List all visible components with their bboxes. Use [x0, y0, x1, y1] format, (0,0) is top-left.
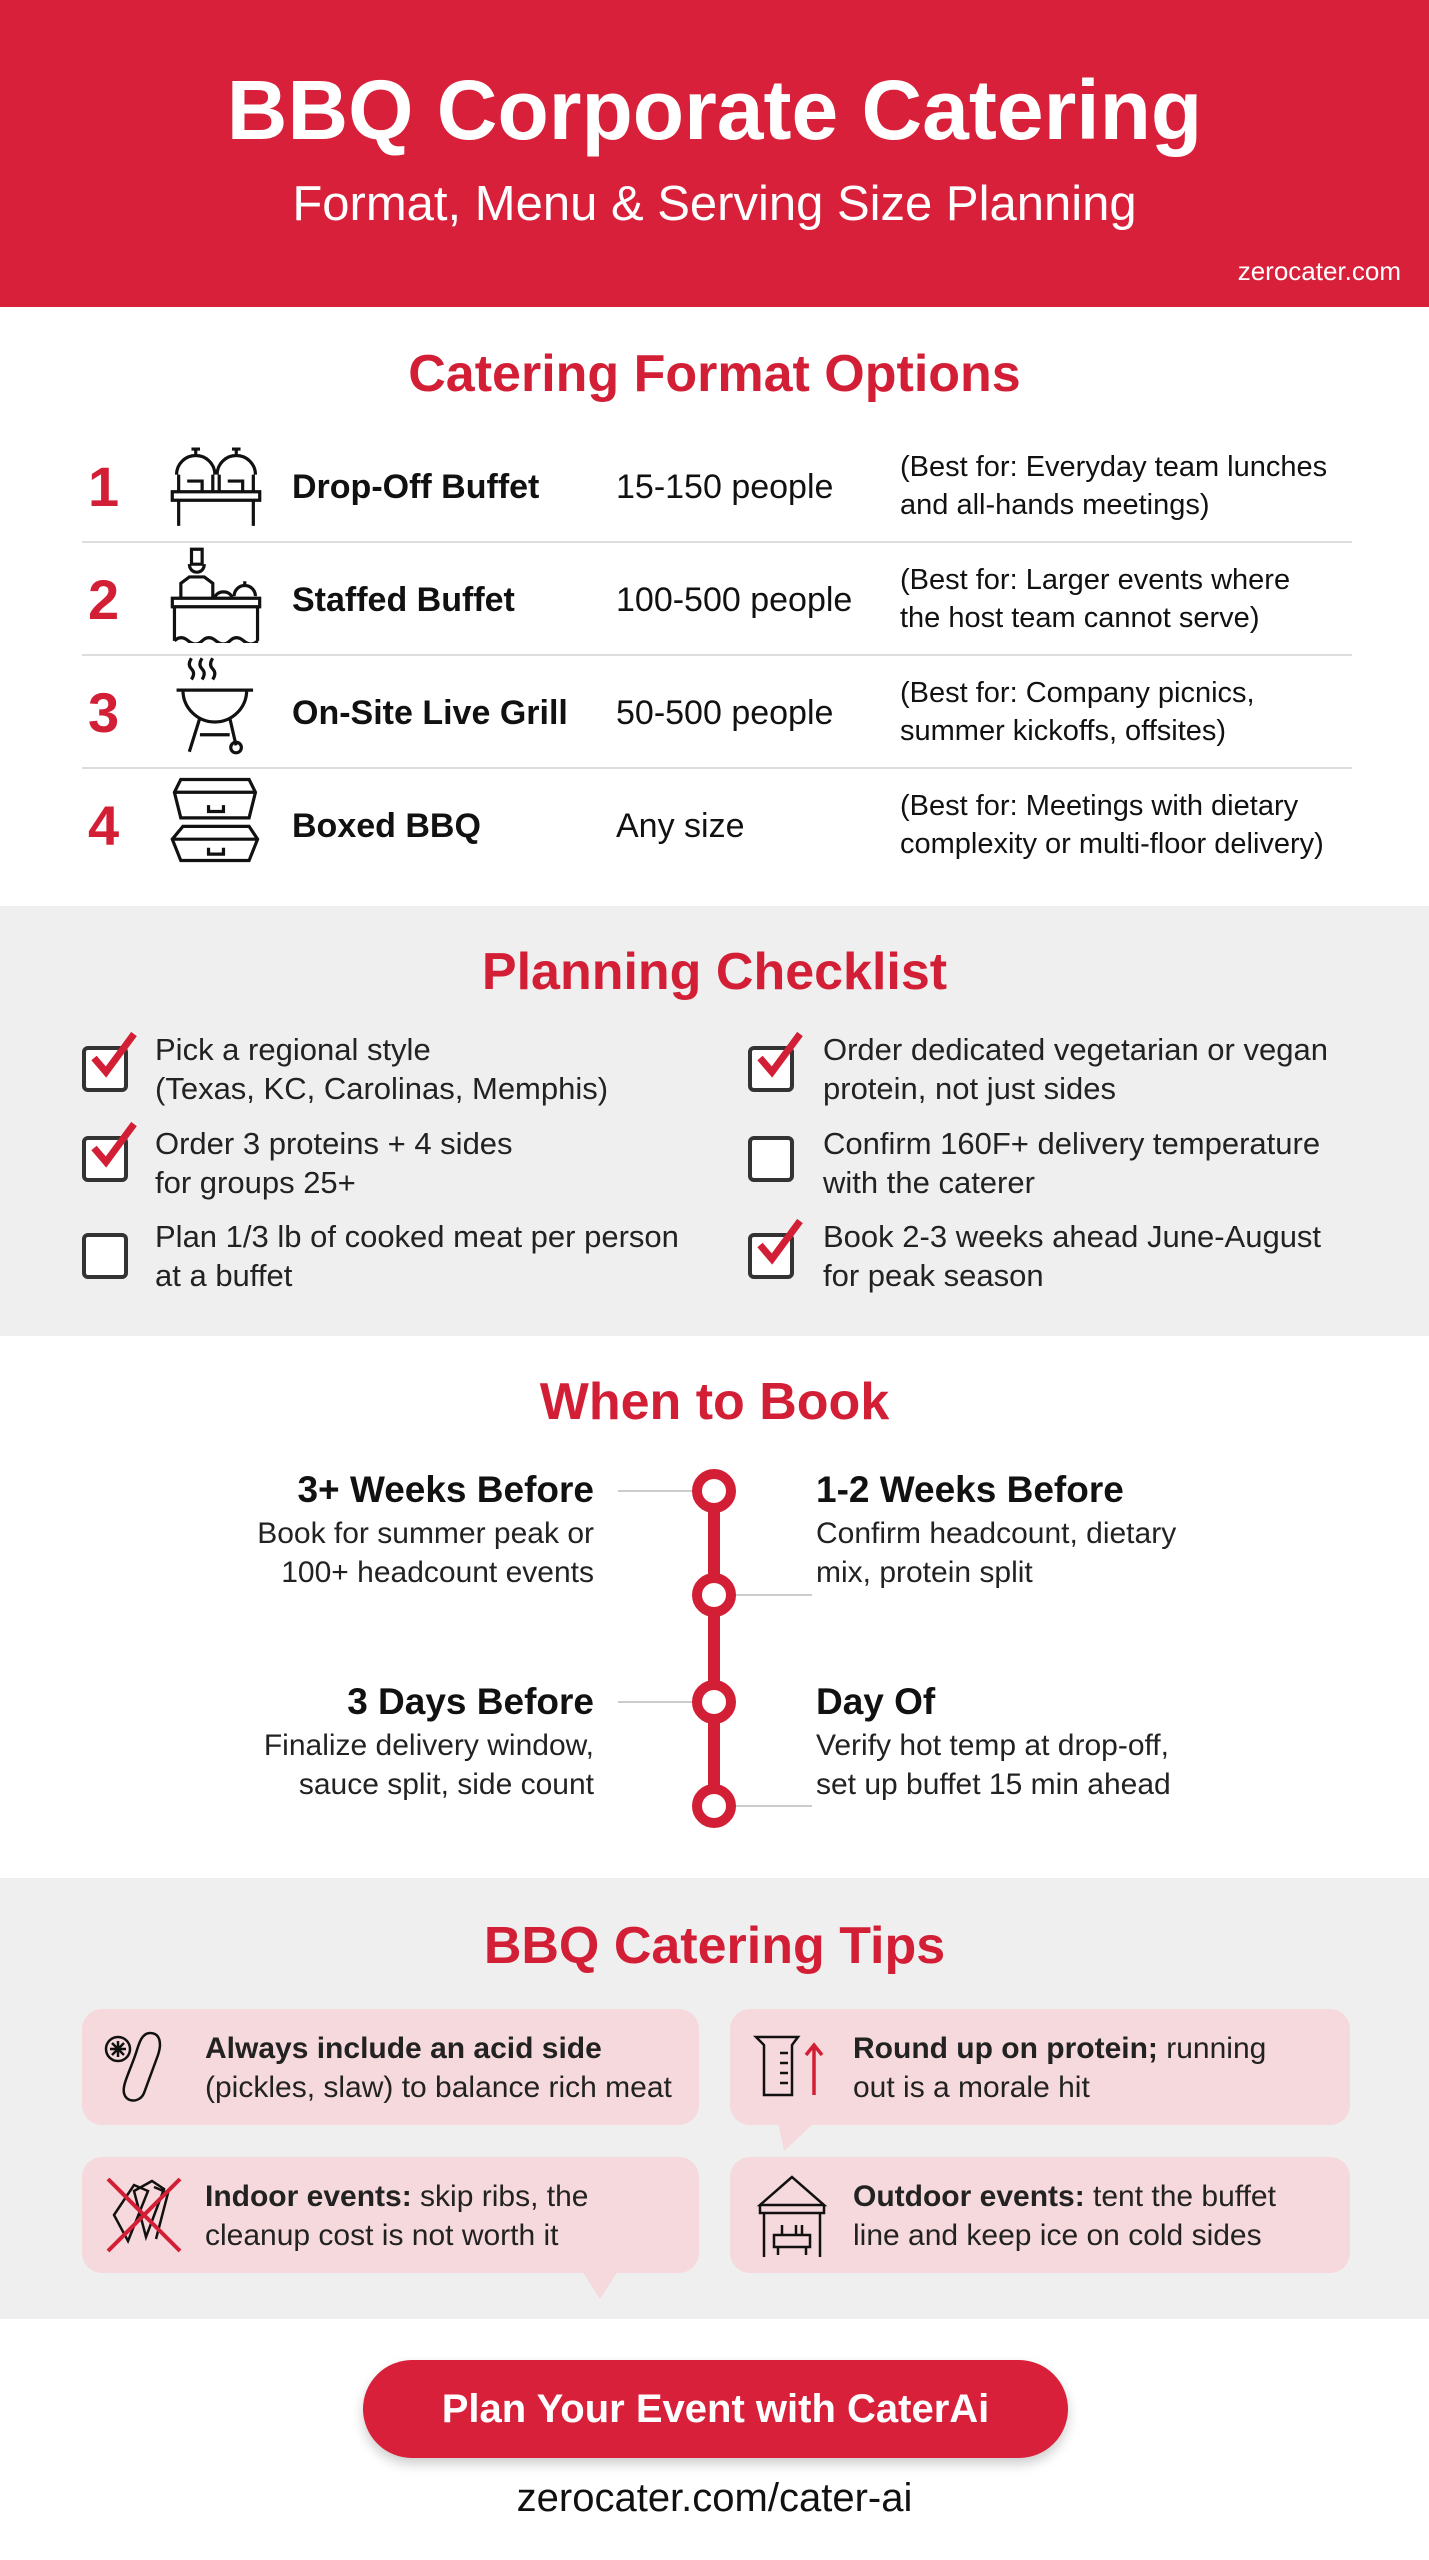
row 2: the host team cannot serve)	[900, 602, 1259, 634]
icon: boxes	[170, 778, 260, 862]
item 1: Pick a regional style	[155, 1032, 431, 1067]
row 3: 3	[88, 681, 119, 744]
item 6	[748, 1218, 1321, 1293]
item 6: for peak season	[823, 1258, 1044, 1293]
tip: round up	[730, 2009, 1350, 2125]
item 2: for groups 25+	[155, 1165, 356, 1200]
item 4	[748, 1032, 1328, 1106]
item 4: Order dedicated vegetarian or vegan	[823, 1032, 1328, 1067]
row 4: Any size	[616, 807, 744, 845]
section heading: When to Book: When to Book	[540, 1373, 889, 1431]
step: day of: set up buffet 15 min ahead	[816, 1768, 1171, 1801]
panel: BBQ catering tips	[0, 1878, 1429, 2319]
tip: acid side: (pickles, slaw) to balance rich meat	[205, 2071, 672, 2104]
step: day of: Verify hot temp at drop-off,	[816, 1729, 1169, 1762]
site url: zerocater.com	[1238, 256, 1401, 286]
step: day of: Day Of	[816, 1681, 935, 1722]
heading: BBQ Catering Tips	[484, 1917, 945, 1975]
icon: grill	[176, 657, 254, 754]
step: 1-2 weeks: Confirm headcount, dietary	[816, 1517, 1176, 1550]
item 5: Confirm 160F+ delivery temperature	[823, 1126, 1320, 1161]
tip: indoor events: Indoor events: skip ribs, the	[205, 2180, 588, 2213]
item 5	[748, 1126, 1320, 1200]
header	[0, 0, 1429, 307]
row 2: (Best for: Larger events where	[900, 564, 1290, 596]
item 4: protein, not just sides	[823, 1071, 1116, 1106]
item 2: Order 3 proteins + 4 sides	[155, 1126, 513, 1161]
item 3: at a buffet	[155, 1258, 292, 1293]
tip: round up: Round up on protein; running	[853, 2032, 1266, 2065]
tip: acid side: Always include an acid side	[205, 2032, 602, 2065]
step: 1-2 weeks	[816, 1469, 1176, 1589]
step: 3+ weeks: 100+ headcount events	[281, 1556, 594, 1589]
step: 3+ weeks	[257, 1469, 594, 1589]
tip: indoor events: cleanup cost is not worth it	[205, 2219, 559, 2252]
item 2	[82, 1122, 513, 1200]
subtitle: Format, Menu & Serving Size Planning	[292, 177, 1137, 231]
row 1	[88, 448, 1327, 526]
row 1: Drop-Off Buffet	[292, 468, 539, 506]
item 6: Book 2-3 weeks ahead June-August	[823, 1219, 1321, 1254]
row 4: Boxed BBQ	[292, 807, 481, 845]
tip: acid side	[82, 2009, 699, 2125]
CTA button	[363, 2360, 1068, 2458]
row 3: On-Site Live Grill	[292, 694, 568, 732]
step: 3 days: Finalize delivery window,	[264, 1729, 594, 1762]
tip: outdoor events	[730, 2157, 1350, 2273]
row 3: (Best for: Company picnics,	[900, 677, 1255, 709]
row 3: summer kickoffs, offsites)	[900, 715, 1226, 747]
step: 3+ weeks: Book for summer peak or	[257, 1517, 594, 1550]
footer url: zerocater.com/cater-ai	[517, 2476, 912, 2520]
panel: format options	[82, 448, 1352, 862]
row 1: 15-150 people	[616, 468, 833, 506]
tip: indoor events	[82, 2157, 699, 2273]
step: 1-2 weeks: mix, protein split	[816, 1556, 1033, 1589]
icon: chafing dishes	[170, 448, 262, 526]
CTA button: Plan Your Event with CaterAi	[442, 2387, 989, 2431]
tip: outdoor events: Outdoor events: tent the buffet	[853, 2180, 1276, 2213]
icon: staffed buffet	[170, 548, 262, 643]
row 4	[88, 778, 1324, 862]
step: 3+ weeks: 3+ Weeks Before	[297, 1469, 594, 1510]
heading: Planning Checklist	[482, 943, 947, 1001]
row 1: (Best for: Everyday team lunches	[900, 451, 1327, 483]
row 2: Staffed Buffet	[292, 581, 515, 619]
row 2: 2	[88, 568, 119, 631]
row 4: complexity or multi-floor delivery)	[900, 828, 1324, 860]
step: 3 days: sauce split, side count	[299, 1768, 594, 1801]
row 4: 4	[88, 794, 119, 857]
row 1: 1	[88, 455, 119, 518]
row 2: 100-500 people	[616, 581, 852, 619]
step: day of	[816, 1681, 1171, 1801]
row 2	[88, 548, 1290, 643]
tip: outdoor events: line and keep ice on cold sides	[853, 2219, 1262, 2252]
step: 3 days: 3 Days Before	[347, 1681, 594, 1722]
item 5: with the caterer	[823, 1165, 1035, 1200]
timeline	[257, 1469, 1176, 1828]
row 3: 50-500 people	[616, 694, 833, 732]
step: 1-2 weeks: 1-2 Weeks Before	[816, 1469, 1124, 1510]
tip: round up: out is a morale hit	[853, 2071, 1090, 2104]
section heading: Catering Format Options: Catering Format Options	[408, 345, 1021, 403]
panel: planning checklist	[0, 906, 1429, 1336]
item 1	[82, 1032, 608, 1106]
item 3	[82, 1219, 679, 1293]
item 3: Plan 1/3 lb of cooked meat per person	[155, 1219, 679, 1254]
step: 3 days	[264, 1681, 594, 1801]
row 3	[88, 657, 1255, 754]
title: BBQ Corporate Catering	[227, 63, 1202, 157]
row 4: (Best for: Meetings with dietary	[900, 790, 1298, 822]
item 1: (Texas, KC, Carolinas, Memphis)	[155, 1071, 608, 1106]
row 1: and all-hands meetings)	[900, 489, 1210, 521]
